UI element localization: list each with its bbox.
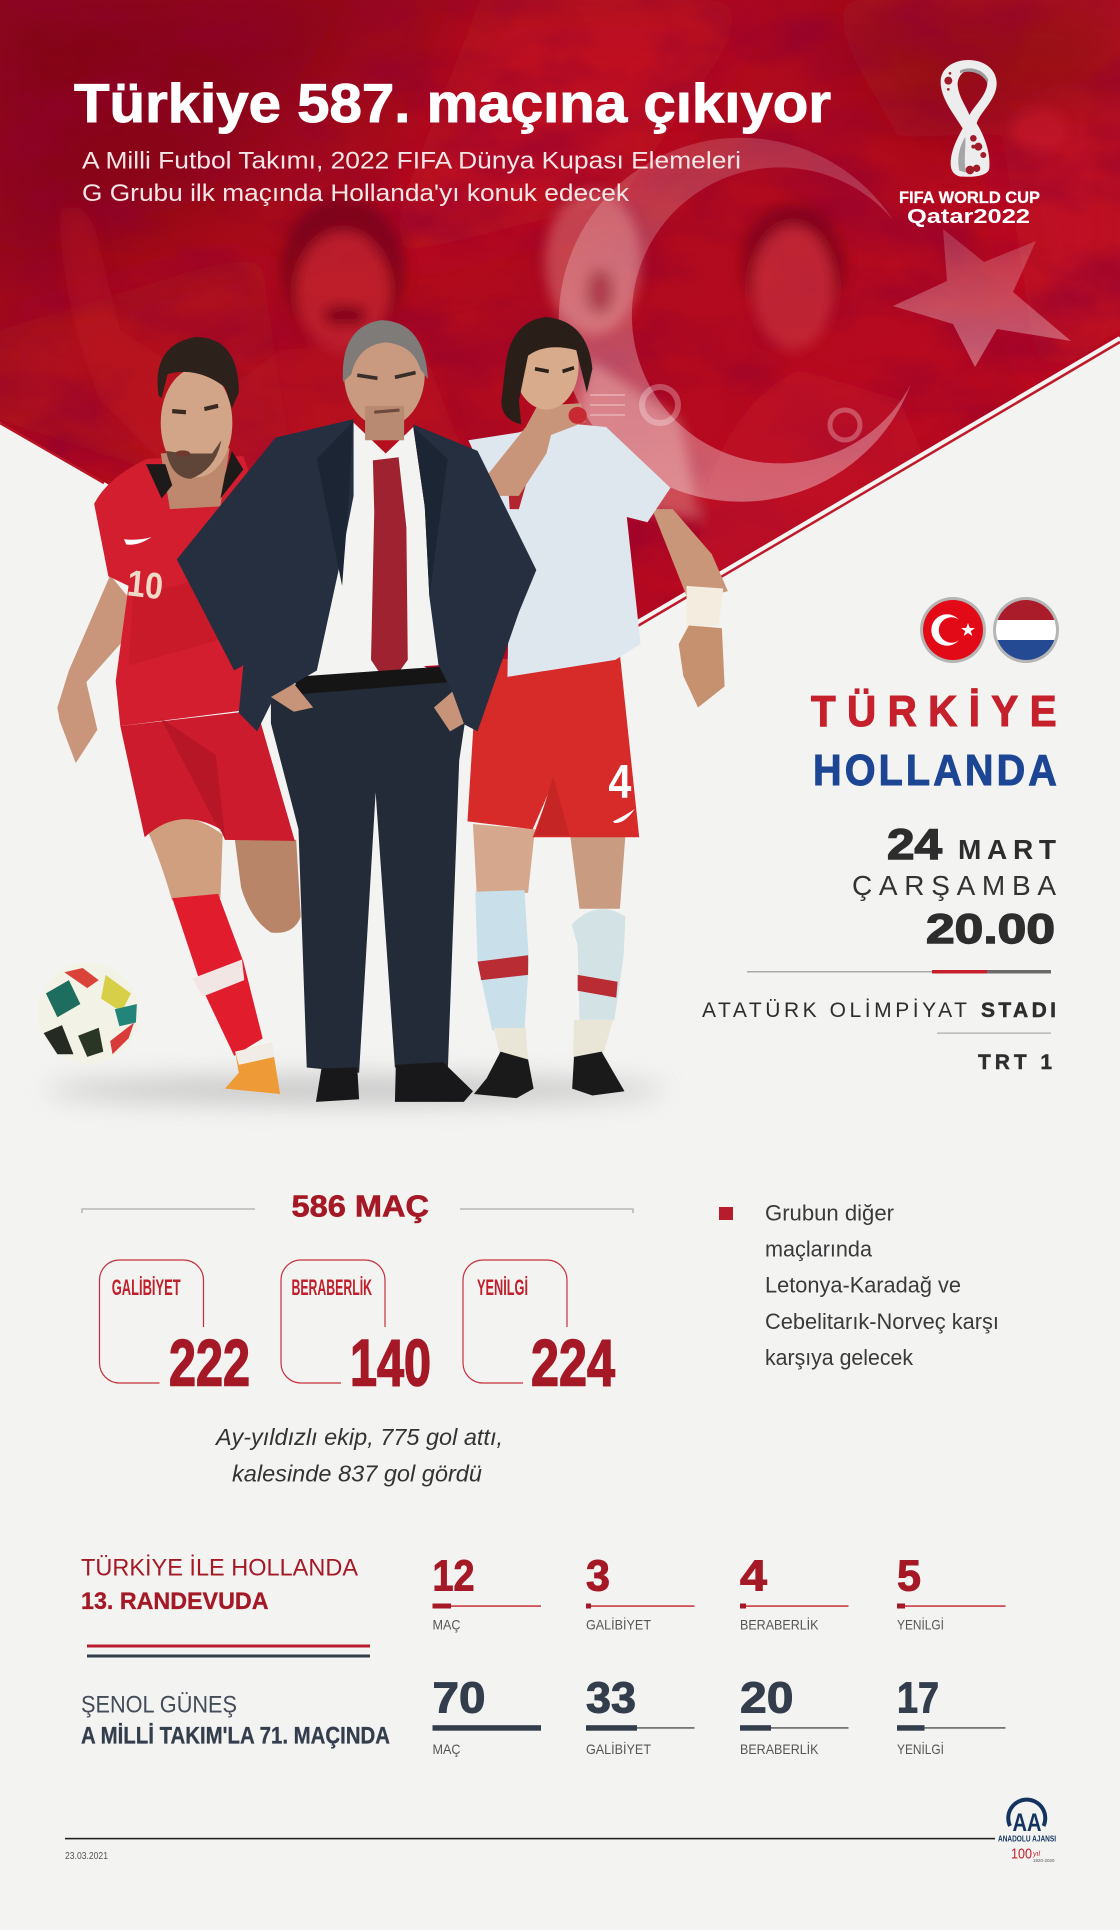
stat: draws: BERABERLİK [740, 1616, 819, 1632]
subtitle: A Milli Futbol Takımı, 2022 FIFA Dünya Kupası Elemeleri [82, 148, 741, 174]
player: white kit (Çağlar): 4 [608, 756, 632, 808]
card: wins: 222 [169, 1326, 250, 1400]
match date and time [852, 821, 1056, 952]
stat: losses: YENİLGİ [897, 1616, 944, 1632]
coach heading: ŞENOL GÜNEŞ [81, 1692, 237, 1718]
stat: matches: MAÇ [432, 1616, 460, 1632]
goals note: Ay-yıldızlı ekip, 775 gol attı, [214, 1424, 503, 1450]
player: white kit (Çağlar) [467, 317, 728, 1098]
date: 23.03.2021 [65, 1851, 108, 1862]
stat: draws: 20 [740, 1674, 794, 1722]
stat: draws: 4 [740, 1552, 768, 1600]
stat: losses [897, 1674, 1006, 1757]
card: draws [281, 1260, 431, 1400]
title: Türkiye 587. maçına çıkıyor [74, 72, 831, 134]
section: 586 matches [82, 1188, 633, 1486]
stats: coach [432, 1674, 1006, 1757]
heading: 586 MAÇ [292, 1188, 429, 1224]
ghost jersey rings [590, 387, 860, 440]
match date and time: 20.00 [926, 905, 1055, 952]
coach: Şenol Güneş [177, 320, 536, 1102]
flag: Turkey [920, 597, 986, 663]
stat: matches: MAÇ [432, 1741, 460, 1757]
logo: FIFA World Cup Qatar 2022: FIFA WORLD CUP [899, 188, 1040, 207]
ghost player: right [696, 201, 916, 571]
flag: Netherlands [990, 597, 1062, 663]
coach jacket [177, 419, 536, 731]
match date and time: MART [958, 834, 1056, 865]
stat: losses: 17 [897, 1674, 939, 1722]
stat: draws [740, 1674, 848, 1757]
logo: Anadolu Ajansı: yıl [1032, 1851, 1040, 1858]
stat: wins [586, 1552, 694, 1632]
photo cut-out figures [37, 317, 728, 1102]
player: red kit (Hakan): 10 [125, 563, 165, 608]
head-to-head heading: TÜRKİYE İLE HOLLANDA [81, 1554, 358, 1582]
subtitle [82, 148, 741, 207]
group note: Grubun diğer [765, 1201, 894, 1226]
flag crescent [559, 138, 911, 502]
card: draws: 140 [350, 1326, 431, 1400]
card: losses [463, 1260, 615, 1400]
stats: head-to-head [432, 1552, 1006, 1632]
football [37, 963, 139, 1064]
stat: wins [586, 1674, 694, 1757]
stat: wins: GALİBİYET [586, 1740, 651, 1757]
broadcaster: TRT 1 [978, 1051, 1052, 1074]
ghost player: left [61, 194, 445, 470]
stat: wins: GALİBİYET [586, 1616, 651, 1632]
group note [719, 1201, 999, 1370]
match teams: TÜRKİYE [811, 686, 1057, 735]
ghost raised fist [1014, 110, 1062, 150]
stat: wins: 33 [586, 1674, 636, 1722]
group note: Cebelitarık-Norveç karşı [765, 1309, 999, 1334]
stadium: STADI [981, 999, 1056, 1022]
player: red kit (Hakan) [57, 337, 301, 1094]
logo: Anadolu Ajansı [998, 1800, 1056, 1863]
subtitle: G Grubu ilk maçında Hollanda'yı konuk edecek [82, 180, 630, 207]
coach heading: A MİLLİ TAKIM'LA 71. MAÇINDA [81, 1722, 390, 1750]
logo: Anadolu Ajansı: 100 [1011, 1846, 1032, 1862]
ghost player: centre [545, 190, 700, 520]
stat: matches [432, 1552, 541, 1632]
match teams: HOLLANDA [813, 745, 1057, 794]
stadium: ATATÜRK OLİMPİYAT [702, 999, 967, 1022]
stat: losses [897, 1552, 1006, 1632]
stat: draws [740, 1552, 848, 1632]
red flag banner [0, 0, 1120, 720]
group note: Letonya-Karadağ ve [765, 1273, 961, 1298]
ghost players in background [61, 184, 916, 571]
card: losses: YENİLGİ [477, 1275, 528, 1300]
match teams [811, 686, 1057, 794]
footer rule [65, 1838, 995, 1839]
head-to-head heading [81, 1554, 358, 1615]
card: wins: GALİBİYET [112, 1275, 181, 1300]
logo: Anadolu Ajansı: ANADOLU AJANSI [998, 1834, 1056, 1844]
group note: karşıya gelecek [765, 1345, 914, 1370]
match date and time: 24 [887, 821, 942, 869]
stat: draws: BERABERLİK [740, 1740, 819, 1757]
stat: wins: 3 [586, 1552, 610, 1600]
diagonal border: right [636, 338, 1120, 627]
goals note [214, 1424, 503, 1486]
logo: Anadolu Ajansı: AA [1012, 1809, 1042, 1837]
head-to-head heading: 13. RANDEVUDA [81, 1588, 268, 1615]
logo: FIFA World Cup Qatar 2022 [899, 60, 1040, 228]
coach heading [81, 1692, 390, 1750]
flags [920, 597, 1062, 663]
stat: matches: 70 [432, 1674, 486, 1722]
floor shadow [45, 1077, 665, 1103]
card: draws: BERABERLİK [292, 1275, 372, 1300]
logo: FIFA World Cup Qatar 2022: Qatar2022 [907, 206, 1030, 228]
flag star [893, 229, 1071, 367]
stat: matches [432, 1674, 541, 1757]
card: wins [100, 1260, 250, 1400]
stat: matches: 12 [432, 1552, 474, 1600]
group note: maçlarında [765, 1237, 873, 1262]
goals note: kalesinde 837 gol gördü [232, 1460, 482, 1486]
diagonal border: left [0, 423, 104, 483]
match date and time: ÇARŞAMBA [852, 870, 1056, 901]
card: losses: 224 [531, 1326, 615, 1400]
stat: losses: YENİLGİ [897, 1740, 944, 1757]
stat: losses: 5 [897, 1552, 921, 1600]
logo: Anadolu Ajansı: 1920-2020 [1033, 1858, 1055, 1863]
